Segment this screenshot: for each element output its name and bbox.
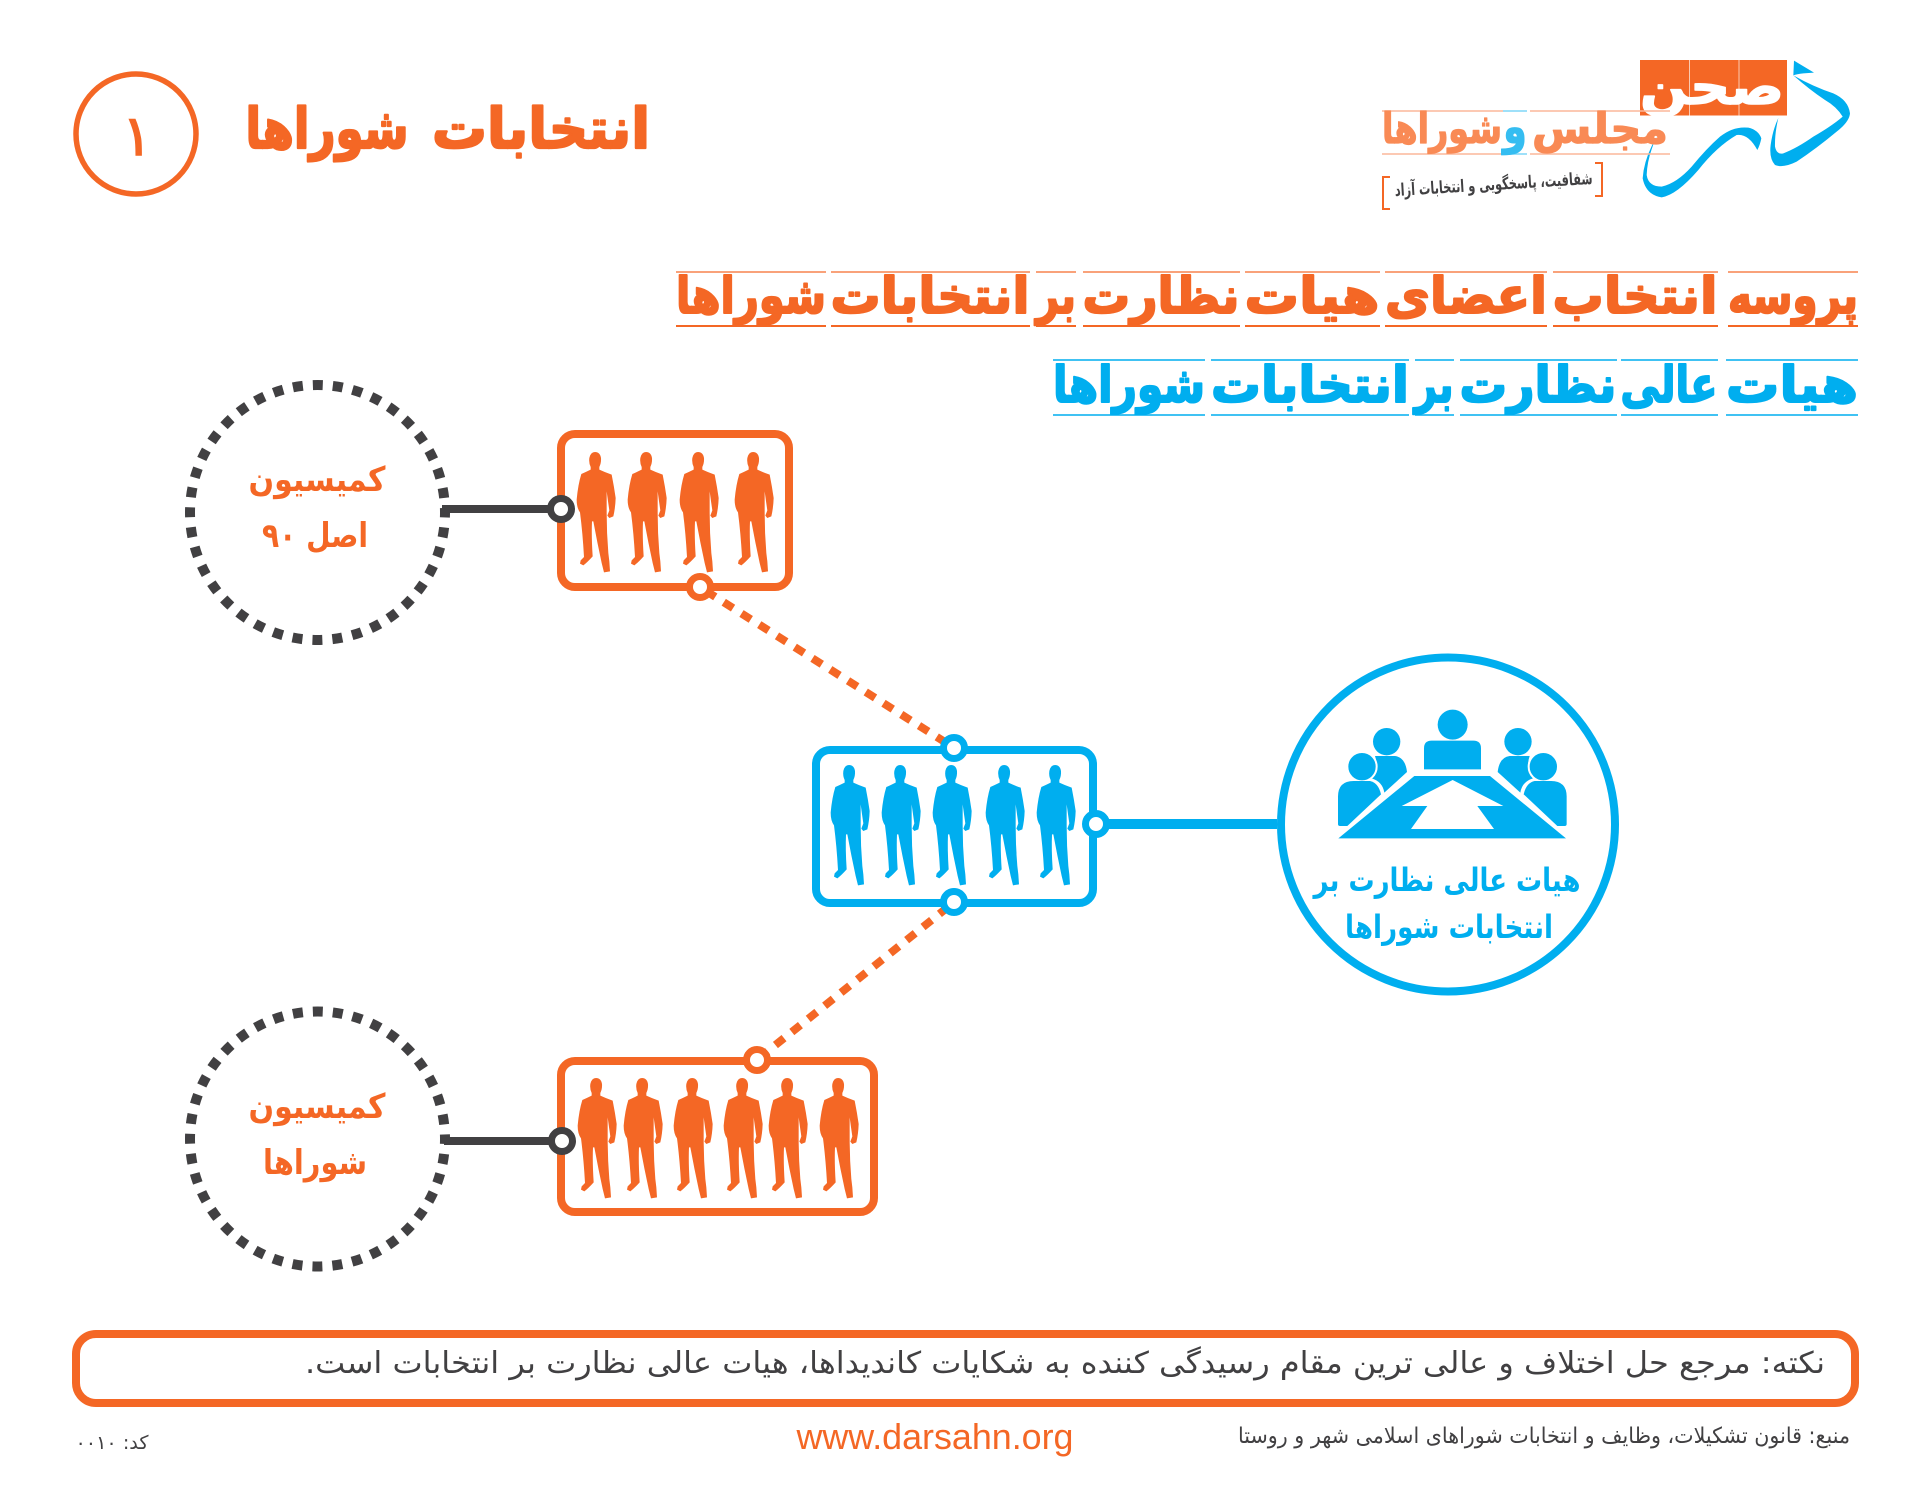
heading: blue subtitle: بر (1412, 356, 1454, 415)
title: انتخابات (432, 97, 650, 162)
panel: high supervisory board circle (1281, 658, 1615, 992)
heading: orange process title: هیات (1244, 267, 1380, 325)
heading: blue subtitle: هیات (1726, 356, 1858, 414)
heading: blue subtitle: عالی (1620, 356, 1718, 414)
label: هیات عالی نظارت بر (1312, 861, 1580, 899)
dashed circle with label: اصل ۹۰ (262, 516, 368, 556)
node: top (746, 1050, 768, 1070)
connector to box (444, 1137, 560, 1145)
label: انتخابات شوراها (1345, 908, 1553, 946)
dashed circle with label: کمیسیون (248, 460, 386, 500)
logo: tagline with brackets (1383, 163, 1602, 209)
icon: meeting table with people (1338, 710, 1567, 838)
logo: orange block with white word: صحن (1640, 58, 1784, 117)
box with four members (561, 434, 789, 587)
heading: orange process title: انتخابات (830, 267, 1030, 325)
logo: faint word lines and rules (1382, 99, 1670, 155)
page number badge (76, 74, 196, 194)
footer: code: کد: ۰۰۱۰ (76, 1432, 149, 1454)
heading: orange process title: انتخاب (1552, 267, 1718, 325)
box with five members (816, 750, 1093, 903)
heading: orange process title: شوراها (676, 267, 826, 326)
heading: blue subtitle: انتخابات (1211, 356, 1409, 414)
panel: commission of councils (190, 1012, 874, 1266)
connector to box (442, 505, 560, 513)
dashed circle with label: کمیسیون (248, 1087, 386, 1127)
logo: darsahn majlis and councils (1382, 58, 1850, 209)
callout: note (76, 1334, 1855, 1403)
dashed circle with label: شوراها (263, 1143, 367, 1183)
logo: blue calligraphic strokes (1643, 61, 1850, 197)
panel: commission article 90 (190, 385, 789, 640)
heading: orange process title (676, 267, 1858, 326)
logo: faint word lines and rules: و (1501, 99, 1527, 155)
page number badge: ۱ (122, 104, 152, 169)
callout: note: نکته: مرجع حل اختلاف و عالی ترین مقام رسیدگی کننده به شکایات کاندیداها، هیات عالی نظارت بر انتخابات است. (305, 1346, 1825, 1381)
label (1312, 861, 1580, 946)
footer: website: www.darsahn.org (796, 1416, 1074, 1457)
node: right (1086, 814, 1106, 834)
node: left (550, 498, 572, 520)
heading: blue subtitle: نظارت (1460, 356, 1616, 414)
box with six members (561, 1061, 874, 1212)
logo: faint word lines and rules: شوراها (1382, 104, 1502, 154)
footer: source: منبع: قانون تشکیلات، وظایف و انتخابات شوراهای اسلامی شهر و روستا (1238, 1424, 1850, 1449)
logo: tagline with brackets: شفافیت، پاسخگویی و انتخابات آزاد (1394, 167, 1593, 201)
title: شوراها (246, 97, 408, 162)
logo: faint word lines and rules: مجلس (1532, 104, 1668, 153)
node: left (552, 1130, 572, 1152)
title (246, 97, 650, 162)
node: bottom (690, 576, 710, 598)
heading: orange process title: نظارت (1082, 267, 1240, 325)
node: bottom (944, 892, 964, 912)
dashed circle with label (190, 1012, 445, 1266)
connector: blue line to board circle (1096, 819, 1277, 829)
panel: supervisory board members (816, 738, 1106, 912)
heading: orange process title: بر (1034, 267, 1076, 326)
heading: orange process title: اعضای (1385, 267, 1547, 325)
heading: blue subtitle (1053, 356, 1858, 415)
connector: orange dotted lower (763, 907, 948, 1055)
node: top (944, 738, 964, 758)
heading: orange process title: پروسه (1728, 267, 1858, 326)
connector: orange dotted upper (706, 591, 948, 744)
heading: blue subtitle: شوراها (1053, 356, 1205, 415)
dashed circle with label (190, 385, 445, 640)
